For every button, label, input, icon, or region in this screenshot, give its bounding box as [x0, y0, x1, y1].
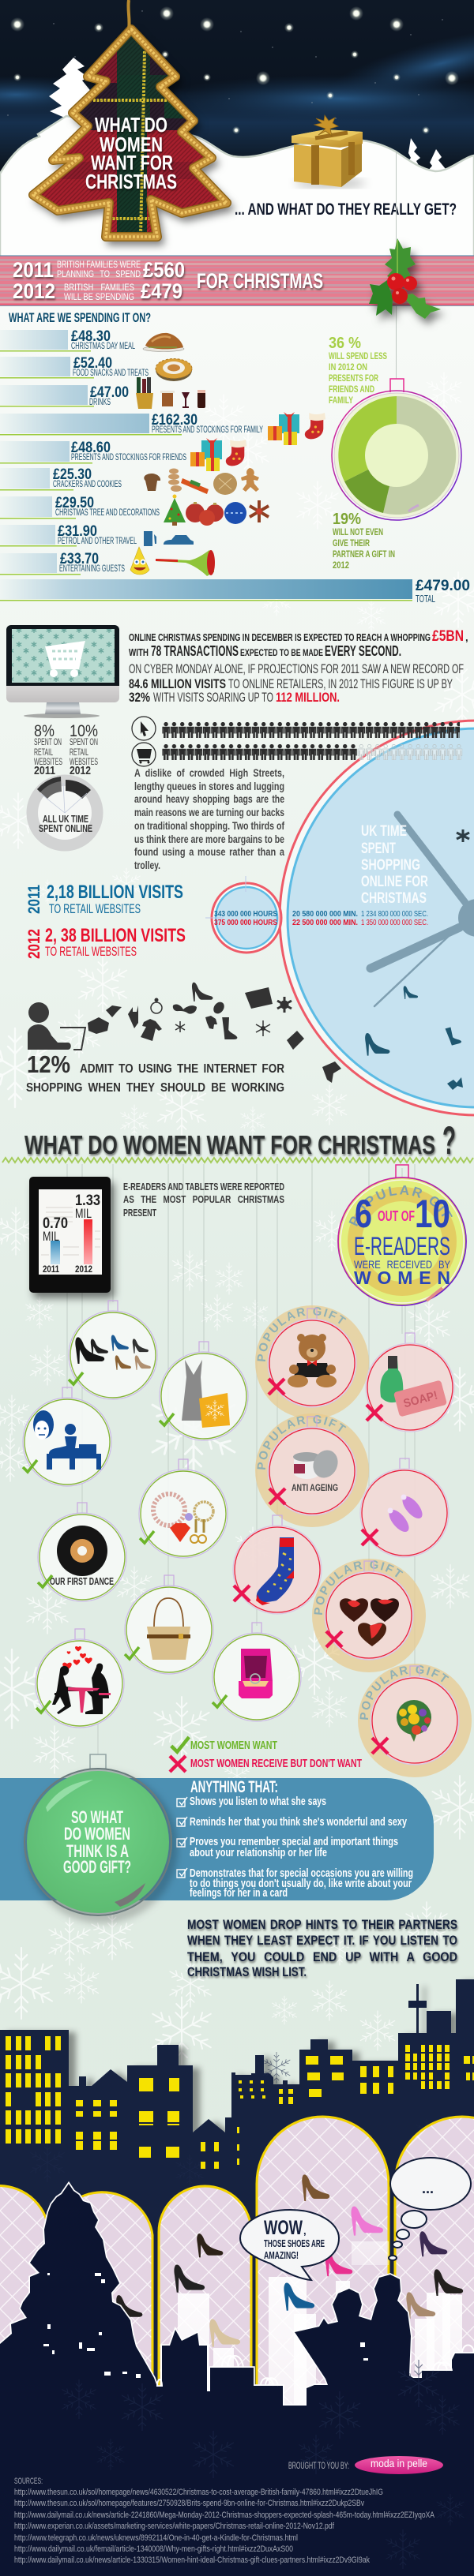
banner: 2011 vs 2012 spending: FOR CHRISTMAS [197, 269, 323, 293]
statistic: 19 percent: PARTNER A GIFT IN [333, 549, 395, 560]
sources: http://www.dailymail.co.uk/femail/article-1340008/Why-men-gifts-right.html#ixzz2DuxAxS00 [14, 2544, 293, 2554]
statistic: 8 and 10 percent retail share: RETAIL [70, 748, 88, 758]
text: 12 percent: SHOPPING WHEN THEY SHOULD BE WORKING [26, 1081, 284, 1095]
values: £48.60 [71, 440, 111, 456]
text: high street dislike: main reasons we are turning our backs [134, 807, 284, 818]
text: e-readers [123, 1181, 284, 1219]
sources: http://www.dailymail.co.uk/news/article-1330315/Women-hint-ideal-Christmas-gift-clues-partners.html#ixzz2Dv9GI9ak [14, 2555, 370, 2565]
statistic: 8 and 10 percent retail share: WEBSITES [70, 758, 98, 767]
ornament: flip-flops, unwanted [360, 1458, 449, 1557]
text: online spending: 32% [129, 690, 150, 705]
labels: FOOD SNACKS AND TREATS [73, 369, 149, 378]
text: e-readers: E-READERS AND TABLETS WERE REPORTED [123, 1181, 284, 1193]
speech bubble: wow: AMAZING! [264, 2249, 299, 2261]
statistic: 19 percent: 19% [333, 511, 361, 528]
statistic: 8 and 10 percent retail share [34, 722, 98, 777]
statistic: 36 percent: IN 2012 ON [329, 361, 367, 373]
green zigzag divider [2, 1158, 473, 1163]
statistic: 8 and 10 percent retail share: 10% [70, 722, 98, 740]
bow [314, 115, 338, 136]
shoes on display [116, 2174, 463, 2347]
icon: party hat and horn [130, 547, 215, 576]
donut chart: UK time online [32, 777, 97, 845]
statistic: 19 percent: 2012 [333, 560, 349, 571]
statistic: 36 percent [329, 335, 387, 406]
dark snowflakes [60, 2360, 465, 2569]
text: high street dislike: found using a mouse rather than a [134, 846, 284, 858]
logo: moda in pelle: moda in pelle [371, 2457, 427, 2469]
title text: WHAT DO [95, 113, 167, 137]
banner: 2011 vs 2012 spending: 2011 [13, 258, 54, 282]
statistic: 2012 visits: TO RETAIL WEBSITES [45, 944, 137, 959]
text: e-readers: PRESENT [123, 1208, 156, 1219]
statistic: 36 percent: WILL SPEND LESS [329, 350, 387, 361]
statistic: 8 and 10 percent retail share: SPENT ON [70, 738, 98, 747]
ornament: jewellery, wanted [139, 1459, 228, 1558]
statistic: 8 and 10 percent retail share: 2011 [34, 764, 55, 777]
clock label: SPENT [361, 841, 396, 857]
thought bubble [389, 2158, 471, 2260]
text: high street dislike: A dislike of crowded High Streets, [134, 767, 284, 779]
statistic: 36 percent: FAMILY [329, 395, 353, 406]
speech bubble: wow [240, 2210, 339, 2280]
banner: 2011 vs 2012 spending: BRITISH FAMILIES [64, 283, 134, 293]
ornament: shoes, wanted [69, 1301, 157, 1399]
text: online spending: 84.6 MILLION VISITS [129, 676, 226, 691]
logo: moda in pelle [355, 2456, 443, 2474]
bag handles [157, 2346, 474, 2387]
text: online spending: 78 TRANSACTIONS [151, 643, 239, 659]
icon: snack plate [156, 358, 192, 381]
text: online spending: EVERY SECOND. [325, 643, 401, 659]
ornament: chocolates, unwanted: POPULAR GIFT [314, 1560, 403, 1615]
text: high street dislike: lengthy queues in stores and lugging [134, 781, 284, 792]
labels: DRINKS [89, 398, 111, 407]
ornament: first dance record, wanted [38, 1503, 126, 1601]
heading: what do women want: ? [442, 1118, 456, 1163]
statistic: 19 percent: GIVE THEIR [333, 537, 370, 549]
hanging threads [67, 1164, 415, 1665]
pie chart ornament [332, 379, 461, 520]
labels: PETROL AND OTHER TRAVEL [58, 537, 137, 546]
banner: 2011 vs 2012 spending: BRITISH FAMILIES WERE [57, 260, 141, 270]
rope border [33, 29, 227, 237]
title text: CHRISTMAS [85, 170, 177, 193]
sources: http://www.experian.co.uk/assets/marketing-services/white-papers/Christmas-retail-online-2012-Nov12.pdf [14, 2522, 335, 2531]
ornament: green question bauble: DO WOMEN [64, 1824, 130, 1844]
bars [0, 330, 412, 599]
icon: drinks [136, 377, 205, 409]
statistic: 8 and 10 percent retail share: RETAIL [34, 748, 53, 758]
panel: good gift list: ANYTHING THAT: [190, 1778, 278, 1796]
ornament: chocolates, unwanted [312, 1559, 426, 1672]
icon: holly [369, 238, 441, 319]
clock hands [371, 814, 474, 1006]
values: £162.30 [152, 412, 198, 429]
ornament: ring box, wanted [213, 1623, 301, 1721]
donut chart: UK time online: ALL UK TIME [43, 813, 88, 825]
values: 1.33 [75, 1193, 100, 1209]
clock label: ONLINE FOR [361, 874, 428, 890]
text: online spending: £5BN [432, 628, 464, 645]
legend: MOST WOMEN RECEIVE BUT DON'T WANT [190, 1757, 362, 1770]
values: 2012 [75, 1265, 92, 1275]
ornament: 6 out of 10 e-readers: POPULAR GIFT [349, 1185, 453, 1226]
ornament: soap, unwanted [366, 1333, 454, 1432]
text: e-readers: AS THE MOST POPULAR CHRISTMAS [123, 1194, 284, 1205]
values: £25.30 [53, 466, 92, 483]
statistic: 2011 visits: 2011 [25, 885, 43, 914]
statistic: 8 and 10 percent retail share: 2012 [70, 764, 91, 777]
legend: MOST WOMEN WANT [190, 1739, 277, 1752]
text: 12 percent: 12% [27, 1050, 70, 1078]
ornament: anti ageing cream, unwanted: ANTI AGEING [292, 1482, 338, 1493]
clock: UK time spent shopping online [280, 721, 474, 1115]
credit: brought to you by: BROUGHT TO YOU BY: [288, 2460, 349, 2471]
labels: PRESENTS AND STOCKINGS FOR FAMILY [152, 425, 263, 435]
ornament: green question bauble: THINK IS A [66, 1841, 129, 1861]
city skyline [0, 1979, 474, 2576]
text: high street dislike: us think there are more bargains to be [134, 833, 284, 845]
flying shopping silhouettes [88, 983, 341, 1083]
clock label: SHOPPING [361, 857, 420, 874]
sources [14, 2477, 435, 2565]
ornament: lingerie, wanted [160, 1342, 248, 1440]
ornament: 6 out of 10 e-readers [337, 1164, 467, 1306]
banner: 2011 vs 2012 spending: PLANNING TO SPEND [57, 270, 141, 279]
figures: 1 234 800 000 000 SEC. [361, 909, 428, 919]
values: £31.90 [58, 523, 97, 540]
icon: turkey [143, 333, 184, 352]
ornament: anti ageing cream, unwanted: POPULAR GIFT [258, 1415, 346, 1470]
text: hints [187, 1917, 457, 1979]
tartan fabric [41, 36, 218, 232]
title text [85, 113, 177, 193]
statistic: 19 percent [333, 511, 395, 571]
statistic: 2011 visits [25, 882, 183, 916]
speech bubble: wow: , [303, 2225, 307, 2237]
statistic: 2011 visits: TO RETAIL WEBSITES [49, 901, 141, 916]
list text: Shows you listen to what she says [190, 1795, 326, 1808]
values: £52.40 [73, 355, 112, 372]
dark snowflakes [28, 2052, 438, 2186]
ornament: 6 out of 10 e-readers: WERE RECEIVED BY [354, 1258, 451, 1271]
snow hills [0, 116, 474, 256]
thought bubble: ... [422, 2181, 434, 2196]
text: online spending: EXPECTED TO BE MADE [240, 647, 323, 658]
banner: 2011 vs 2012 spending [0, 256, 474, 306]
ornament: teddy bear, popular but unwanted: POPULAR GIFT [258, 1307, 346, 1361]
ornament: anti ageing cream, unwanted [255, 1413, 369, 1527]
statistic: 8 and 10 percent retail share: SPENT ON [34, 738, 62, 747]
statistic: 36 percent: 36 % [329, 335, 361, 352]
values: £47.00 [90, 384, 129, 401]
statistic: 8 and 10 percent retail share: WEBSITES [34, 758, 62, 767]
ornament: 6 out of 10 e-readers: OUT OF [378, 1208, 415, 1224]
text: 12 percent: ADMIT TO USING THE INTERNET FOR [80, 1062, 284, 1076]
sources: http://www.telegraph.co.uk/news/uknews/8992114/One-in-40-get-a-Kindle-for-Christmas.html [14, 2533, 298, 2543]
text: online spending: 112 MILLION. [276, 690, 340, 705]
silhouettes: tree, shoppers and bags [0, 2184, 474, 2576]
ornament: dinner date, wanted [36, 1629, 124, 1728]
title text: WOMEN [100, 133, 163, 156]
values: 2011 [43, 1265, 60, 1275]
values: £479.00 [416, 578, 470, 594]
small clock: hours: 375 000 000 HOURS [214, 918, 277, 927]
clock label: UK TIME [361, 823, 407, 840]
values [43, 1193, 100, 1275]
values: 0.70 [43, 1215, 68, 1232]
text: online spending: WITH VISITS SOARING UP TO [153, 690, 273, 705]
tree highlights [43, 2273, 368, 2378]
labels: TOTAL [416, 593, 435, 605]
speech bubble: wow: WOW [264, 2217, 303, 2239]
donut chart: UK time online: SPENT ONLINE [39, 822, 92, 834]
shop windows [0, 2117, 474, 2415]
legend [170, 1737, 362, 1772]
values: £29.50 [55, 495, 94, 511]
heading: spending: WHAT ARE WE SPENDING IT ON? [9, 310, 151, 325]
icon: computer monitor with cart [6, 625, 119, 718]
ornament: handbag, wanted [125, 1575, 213, 1674]
figures: 1 350 000 000 000 SEC. [361, 918, 428, 927]
credit: brought to you by [288, 2456, 443, 2474]
night sky [0, 0, 474, 197]
snowy trees [49, 58, 450, 189]
text: high street dislike: around heavy shopping bags are the [134, 793, 284, 805]
values: MIL [75, 1206, 92, 1221]
clock label [361, 823, 428, 907]
values: £33.70 [60, 551, 99, 567]
statistic: 2012 visits [25, 925, 186, 959]
snowflake background [0, 217, 474, 2065]
text: 12 percent [26, 1050, 284, 1095]
statistic: 36 percent: PRESENTS FOR [329, 373, 378, 384]
icon: presents and stocking, family [268, 412, 325, 445]
icon: gold gift box [292, 115, 366, 188]
statistic: 19 percent: WILL NOT EVEN [333, 526, 383, 537]
statistic: 8 and 10 percent retail share: 8% [34, 722, 55, 740]
text: high street dislike [134, 767, 284, 871]
stars [10, 6, 459, 134]
sources: http://www.thesun.co.uk/sol/homepage/news/4630522/Christmas-to-cost-average-British-family-47860.html#ixzz2DtueJhIG [14, 2488, 383, 2497]
statistic: 36 percent: FRIENDS AND [329, 384, 374, 395]
silhouettes in clock [365, 829, 469, 1090]
ornament: green question bauble: GOOD GIFT? [63, 1857, 131, 1877]
icon: petrol pump and car [144, 531, 194, 546]
ornament: 6 out of 10 e-readers: WOMEN [354, 1267, 450, 1288]
title ornament: tartan tree [24, 0, 237, 245]
icon: cursor circle [132, 717, 156, 740]
icon: tree and decorations [164, 494, 269, 526]
ornament: flowers, unwanted [358, 1664, 472, 1777]
figures: 20 580 000 000 MIN. [292, 909, 358, 919]
text: online spending [129, 628, 468, 705]
icon: tablet with bar chart [29, 1177, 111, 1293]
icon: cart circle [132, 743, 156, 766]
ornament: flowers, unwanted: POPULAR GIFT [360, 1665, 449, 1720]
small clock: hours: 343 000 000 HOURS [214, 909, 277, 919]
ornament: 6 out of 10 e-readers: 10 [415, 1192, 450, 1236]
labels: ENTERTAINING GUESTS [59, 564, 125, 574]
banner: 2011 vs 2012 spending: WILL BE SPENDING [64, 293, 134, 302]
hanging thread [395, 152, 397, 379]
bar chart: spending categories [0, 328, 470, 605]
text: hints: CHRISTMAS WISH LIST. [187, 1964, 307, 1979]
bars [51, 1241, 60, 1264]
title text: WANT FOR [91, 151, 173, 174]
labels: PRESENTS AND STOCKINGS FOR FRIENDS [71, 453, 186, 462]
sources: http://www.thesun.co.uk/sol/homepage/features/2750928/Brits-spend-9bn-online-for-Christmas.html#ixzz2Dukp2SBv [14, 2499, 364, 2508]
labels: CHRISTMAS DAY MEAL [71, 342, 135, 351]
sources: SOURCES: [14, 2477, 43, 2486]
icon: presents and stocking, friends [190, 438, 246, 471]
statistic: 2012 visits: 2, 38 BILLION VISITS [45, 925, 186, 946]
figures [292, 909, 428, 927]
statistic: 2011 visits: 2,18 BILLION VISITS [47, 882, 183, 903]
banner: 2011 vs 2012 spending: £479 [141, 279, 182, 303]
text: high street dislike: on traditional shopping. Two thirds of [134, 820, 284, 832]
ornament: green question bauble [24, 1724, 171, 1915]
speech bubble: wow: THOSE SHOES ARE [264, 2237, 325, 2249]
list text: about your relationship or her life [190, 1846, 327, 1859]
ornament: teddy bear, popular but unwanted [255, 1305, 369, 1419]
labels [53, 342, 435, 605]
ornament: socks, unwanted [233, 1515, 322, 1614]
windows [6, 2036, 474, 2169]
ornament: 6 out of 10 e-readers: 6 [355, 1192, 372, 1236]
display pedestals [178, 2241, 462, 2409]
panel: good gift list [0, 1778, 434, 1900]
labels: CRACKERS AND COOKIES [53, 480, 122, 489]
banner: 2011 vs 2012 spending: £560 [143, 258, 185, 282]
banner: 2011 vs 2012 spending: 2012 [13, 279, 55, 303]
hanging cord [128, 0, 130, 30]
list text: feelings for her in a card [190, 1886, 288, 1900]
labels: CHRISTMAS TREE AND DECORATIONS [55, 508, 160, 518]
statistic: 2012 visits: 2012 [25, 929, 43, 959]
ornament: first dance record, wanted: OUR FIRST DANCE [50, 1576, 114, 1587]
figures: 22 500 000 000 MIN. [292, 918, 358, 927]
list text [190, 1795, 413, 1900]
ornament: soap, unwanted: SOAP! [402, 1389, 439, 1410]
values: £48.30 [71, 328, 111, 345]
clock label: CHRISTMAS [361, 890, 427, 907]
text: online spending: WITH [129, 646, 149, 658]
values: MIL [43, 1229, 59, 1244]
heading: what do women want [24, 1118, 456, 1163]
list text: Proves you remember special and important things [190, 1835, 398, 1848]
green underlines [0, 350, 412, 601]
ornament: spa, wanted [23, 1387, 111, 1486]
text: high street dislike: trolley. [134, 859, 160, 871]
icon: person at laptop [28, 1002, 85, 1050]
values [53, 328, 470, 594]
small clock: hours [205, 876, 281, 953]
ornament: green question bauble: SO WHAT [71, 1807, 123, 1827]
icon: crackers and cookies [144, 468, 259, 495]
pictogram rows: visitors [162, 722, 462, 760]
list ticks [177, 1797, 187, 1878]
text: online spending: , [465, 631, 468, 643]
